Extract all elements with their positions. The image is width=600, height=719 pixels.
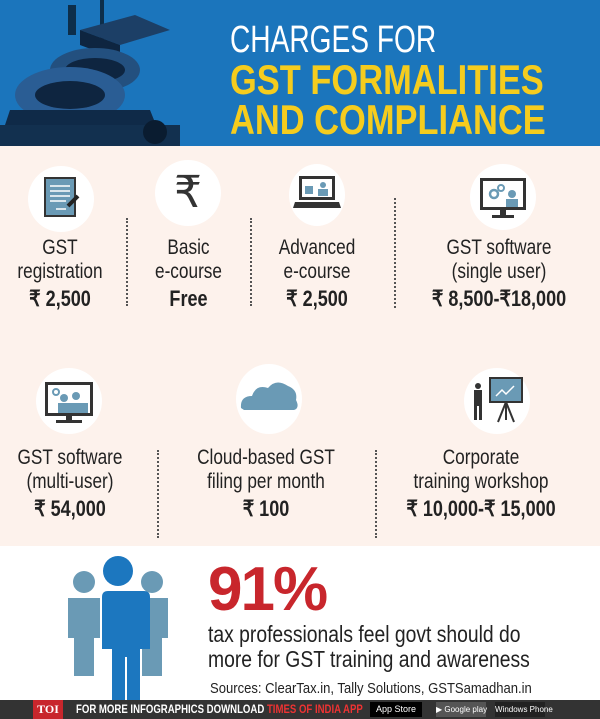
item: Corporate training: training workshop [414, 470, 548, 493]
item: GST software multi-user: (multi-user) [26, 470, 114, 493]
icon: presentation [464, 368, 530, 434]
callout: 91% stat [208, 555, 530, 672]
title [230, 19, 546, 143]
item: Cloud-based filing [197, 364, 335, 521]
item: GST software multi-user: ₹ 54,000 [34, 496, 106, 521]
icon: monitor gears [470, 164, 536, 230]
text: sources: Sources: ClearTax.in, Tally Solutions, GSTSamadhan.in [210, 680, 532, 697]
item: Corporate training [406, 368, 556, 521]
icon: document [28, 166, 94, 232]
item: Basic e-course: Basic [167, 236, 210, 259]
icon: monitor users [36, 368, 102, 434]
footer bar: ▶ Google play [436, 705, 487, 714]
illustration: 3D GST letters [0, 0, 180, 146]
item: Basic e-course: Free [169, 286, 208, 311]
icon: cloud [236, 364, 302, 434]
callout: 91% stat: tax professionals feel govt should do [208, 621, 521, 647]
item: GST registration: registration [17, 260, 103, 283]
item: Advanced e-course: e-course [283, 260, 350, 283]
item: Basic e-course [155, 160, 222, 311]
footer bar: App Store [376, 704, 416, 714]
footer bar: TOI [37, 702, 59, 716]
item: Cloud-based filing: filing per month [207, 470, 325, 493]
item: GST software single user: GST software [447, 236, 551, 259]
callout: 91% stat: more for GST training and awareness [208, 646, 530, 672]
item: GST software multi-user [18, 368, 122, 521]
item: GST software single user: (single user) [452, 260, 546, 283]
item: GST registration [17, 166, 103, 311]
item: GST software single user [432, 164, 566, 311]
panel: charges [0, 146, 600, 546]
item: Basic e-course: e-course [155, 260, 222, 283]
title: GST FORMALITIES [230, 56, 544, 103]
item: GST registration: ₹ 2,500 [29, 286, 91, 311]
item: Cloud-based filing: Cloud-based GST [197, 446, 335, 469]
item: GST software single user: ₹ 8,500-₹18,000 [432, 286, 566, 311]
item: GST registration: GST [42, 236, 78, 259]
title: AND COMPLIANCE [230, 96, 546, 143]
item: Cloud-based filing: ₹ 100 [243, 496, 289, 521]
title: CHARGES FOR [230, 19, 436, 61]
footer bar [0, 700, 600, 719]
item: Advanced e-course: ₹ 2,500 [286, 286, 348, 311]
icon: rupee [155, 160, 221, 226]
icon: people group [68, 556, 168, 700]
header banner [0, 0, 600, 146]
footer bar: FOR MORE INFOGRAPHICS DOWNLOAD TIMES OF INDIA APP [76, 702, 363, 716]
item: Advanced e-course: Advanced [279, 236, 355, 259]
item: Advanced e-course [278, 164, 355, 311]
icon: laptop [289, 164, 345, 226]
item: Corporate training: ₹ 10,000-₹ 15,000 [406, 496, 556, 521]
footer bar: Windows Phone [495, 705, 553, 714]
icon: rupee: ₹ [174, 168, 202, 217]
item: Corporate training: Corporate [443, 446, 519, 469]
callout: 91% stat: 91% [208, 555, 326, 624]
item: GST software multi-user: GST software [18, 446, 122, 469]
